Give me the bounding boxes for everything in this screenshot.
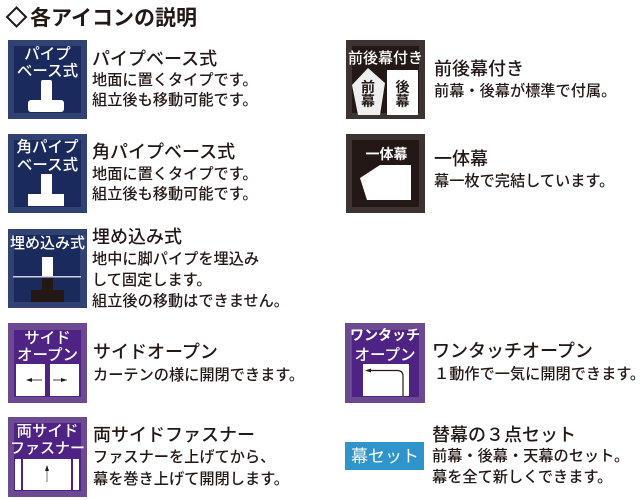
icon: pipe base: ベース式 bbox=[17, 62, 79, 80]
text: curtain set: 前幕・後幕・天幕のセット。 bbox=[432, 448, 629, 465]
text: side open: サイドオープン bbox=[93, 342, 218, 362]
icon: side open: サイド bbox=[24, 330, 71, 347]
icon: pipe base bbox=[8, 40, 87, 119]
icon: front and rear curtain: 後 bbox=[396, 79, 410, 95]
icon: both side fastener: 両サイド bbox=[16, 423, 79, 440]
text: one touch open: １動作で一気に開閉できます。 bbox=[434, 366, 640, 383]
icon: both side fastener: ファスナー bbox=[10, 440, 85, 457]
text: pipe base: 組立後も移動可能です。 bbox=[92, 92, 258, 109]
text: curtain set: 幕を全て新しくできます。 bbox=[432, 469, 612, 486]
text: front and rear curtain bbox=[434, 59, 616, 100]
icon: one touch open: ワンタッチ bbox=[350, 327, 420, 343]
text: one piece curtain bbox=[434, 149, 614, 190]
text: curtain set: 替幕の３点セット bbox=[432, 425, 576, 445]
text: both side fastener: 両サイドファスナー bbox=[93, 425, 255, 445]
icon: square pipe base bbox=[8, 134, 87, 213]
icon: one touch open: オープン bbox=[354, 346, 416, 364]
icon: buried bbox=[8, 229, 87, 308]
text: one piece curtain: 幕一枚で完結しています。 bbox=[434, 173, 614, 190]
text: front and rear curtain: 前幕・後幕が標準で付属。 bbox=[434, 82, 616, 100]
text: one piece curtain: 一体幕 bbox=[434, 149, 488, 169]
text: curtain set bbox=[432, 425, 629, 486]
text: one touch open: ワンタッチオープン bbox=[432, 341, 593, 361]
text: buried: 地中に脚パイプを埋込み bbox=[92, 251, 259, 268]
icon: front and rear curtain: 幕 bbox=[361, 93, 375, 109]
text: both side fastener: ファスナーを上げてから、 bbox=[93, 449, 275, 466]
icon: side open bbox=[8, 323, 87, 403]
text: buried: して固定します。 bbox=[92, 272, 212, 289]
text: square pipe base: 組立後も移動可能です。 bbox=[92, 186, 258, 203]
text: pipe base: パイプベース式 bbox=[92, 49, 217, 69]
icon: front and rear curtain: 前 bbox=[361, 79, 375, 95]
icon: square pipe base: 角パイプ bbox=[16, 138, 79, 156]
text: square pipe base: 角パイプベース式 bbox=[92, 142, 235, 162]
icon: buried: 埋め込み式 bbox=[10, 235, 85, 252]
icon: one touch open bbox=[345, 323, 425, 403]
text: pipe base: 地面に置くタイプです。 bbox=[92, 72, 258, 89]
text: pipe base bbox=[92, 49, 258, 109]
heading: 各アイコンの説明 bbox=[30, 6, 197, 30]
icon: side open: オープン bbox=[17, 346, 78, 364]
text: side open: カーテンの様に開閉できます。 bbox=[93, 367, 304, 384]
icon: front and rear curtain: 前後幕付き bbox=[348, 50, 423, 67]
text: both side fastener bbox=[93, 425, 289, 488]
icon: curtain set: 幕セット bbox=[351, 447, 419, 466]
icon: front and rear curtain bbox=[346, 40, 425, 119]
text: side open bbox=[93, 342, 304, 384]
text: square pipe base: 地面に置くタイプです。 bbox=[92, 166, 258, 183]
text: one touch open bbox=[432, 341, 640, 383]
text: buried: 埋め込み式 bbox=[92, 227, 182, 247]
icon: curtain set bbox=[345, 442, 424, 470]
icon: front and rear curtain: 幕 bbox=[396, 93, 410, 109]
text: buried bbox=[92, 227, 289, 310]
icon: square pipe base: ベース式 bbox=[17, 156, 79, 174]
text: both side fastener: 幕を巻き上げて開閉します。 bbox=[93, 471, 289, 488]
text: front and rear curtain: 前後幕付き bbox=[434, 59, 524, 79]
icon: pipe base: パイプ bbox=[24, 45, 71, 63]
text: square pipe base bbox=[92, 142, 258, 203]
icon: one piece curtain bbox=[346, 134, 425, 213]
text: buried: 組立後の移動はできません。 bbox=[92, 293, 289, 310]
icon: both side fastener bbox=[8, 417, 87, 497]
icon: one piece curtain: 一体幕 bbox=[366, 146, 408, 162]
